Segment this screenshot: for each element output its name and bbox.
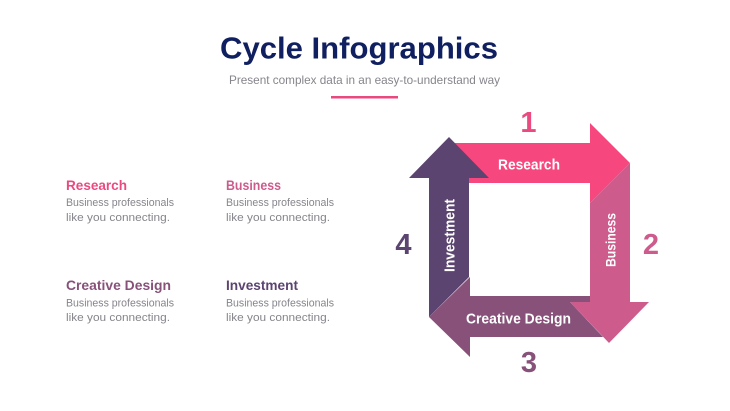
number 3: 3 <box>521 347 537 379</box>
text block: business: like you connecting. <box>226 212 330 224</box>
body: business: Business professionals <box>226 197 334 209</box>
cycle diagram <box>395 107 659 379</box>
number 2: 2 <box>643 229 659 261</box>
arrow: investment <box>409 137 489 317</box>
body: research: Business professionals <box>66 197 174 209</box>
text block: creative design <box>66 277 174 324</box>
text block: business <box>226 177 334 224</box>
arrow label: research: Research <box>498 156 560 174</box>
text block: investment <box>226 277 334 324</box>
heading: investment: Investment <box>226 277 298 293</box>
arrow: creative design <box>429 277 603 357</box>
title: Cycle Infographics <box>220 30 498 66</box>
heading: creative design: Creative Design <box>66 277 171 293</box>
heading: business: Business <box>226 177 281 193</box>
body: creative design: Business professionals <box>66 298 174 310</box>
heading: research: Research <box>66 177 127 193</box>
number 1: 1 <box>520 107 537 139</box>
number 4: 4 <box>395 229 412 261</box>
subtitle: Present complex data in an easy-to-understand way <box>229 73 500 87</box>
arrow label: business: Business <box>602 213 618 267</box>
arrow: business <box>570 163 649 343</box>
text block: investment: like you connecting. <box>226 312 330 324</box>
text block: research <box>66 177 174 224</box>
arrow label: investment: Investment <box>442 199 458 272</box>
text block: research: like you connecting. <box>66 212 170 224</box>
arrow label: creative design: Creative Design <box>466 310 571 328</box>
arrow: research <box>455 123 630 203</box>
body: investment: Business professionals <box>226 298 334 310</box>
title underline <box>331 96 398 98</box>
text block: creative design: like you connecting. <box>66 312 170 324</box>
